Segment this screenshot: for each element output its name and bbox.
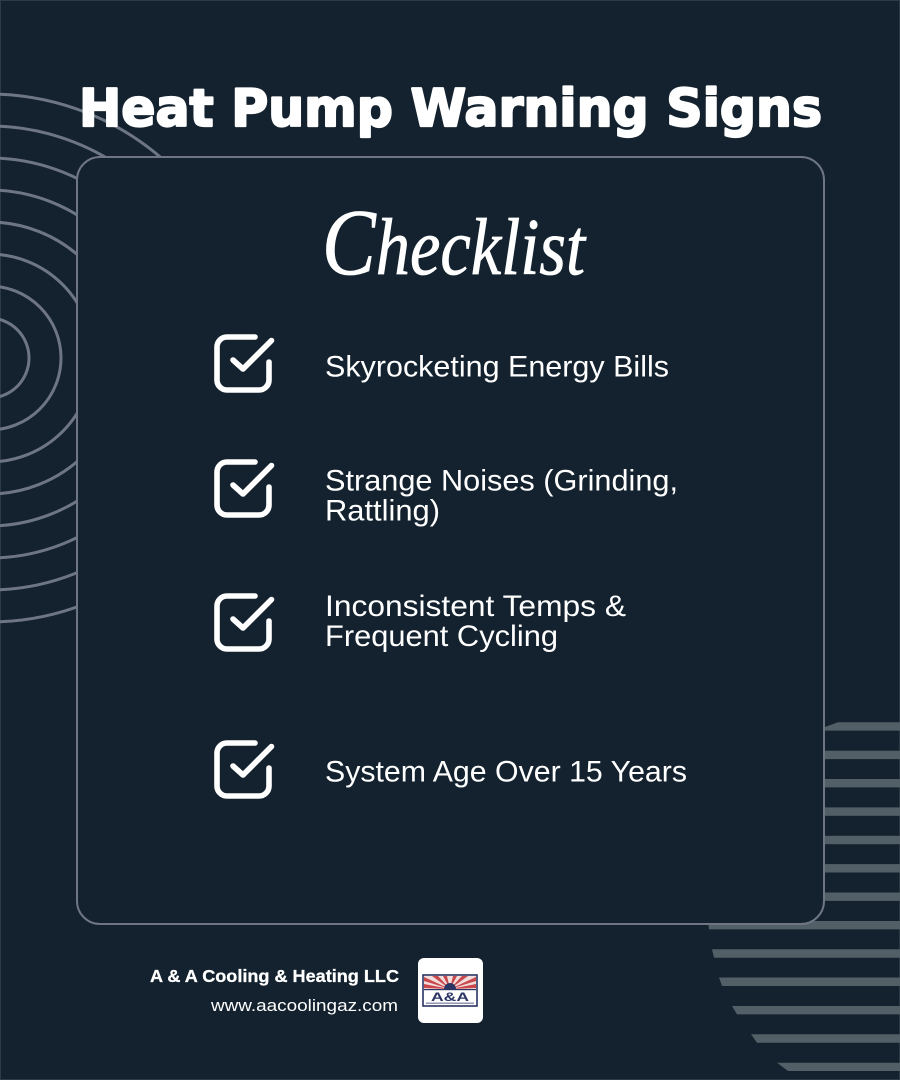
text: item 3 <box>325 590 626 653</box>
panel heading: Checklist: Checklist <box>322 191 587 295</box>
background decoration: concentric circles <box>0 94 253 622</box>
text: item 1: Skyrocketing Energy Bills <box>325 350 669 384</box>
text: item 4: System Age Over 15 Years <box>325 756 687 788</box>
icon: checkbox 2 <box>217 462 272 515</box>
footer: company name: A & A Cooling & Heating LLC <box>150 966 399 986</box>
icon: company logo <box>418 958 483 1023</box>
text: item 2: Strange Noises (Grinding, <box>325 464 678 498</box>
text: item 2 <box>325 464 678 528</box>
icon: checkbox 4 <box>217 743 272 796</box>
icon: checkbox 1 <box>217 337 272 390</box>
checklist item 4 <box>217 743 687 796</box>
text: item 3: Inconsistent Temps & <box>325 590 626 623</box>
checklist item 1 <box>217 337 669 390</box>
icon: company logo: A&A <box>431 992 469 1004</box>
title: Heat Pump Warning Signs <box>79 79 822 139</box>
text: item 2: Rattling) <box>325 494 440 528</box>
checklist panel <box>77 157 824 924</box>
background decoration: horizontal stripes <box>708 722 900 1071</box>
footer: website: www.aacoolingaz.com <box>210 997 398 1015</box>
text: item 3: Frequent Cycling <box>325 620 558 653</box>
icon: checkbox 3 <box>217 596 272 649</box>
checklist item 2 <box>217 462 678 528</box>
checklist item 3 <box>217 590 626 653</box>
